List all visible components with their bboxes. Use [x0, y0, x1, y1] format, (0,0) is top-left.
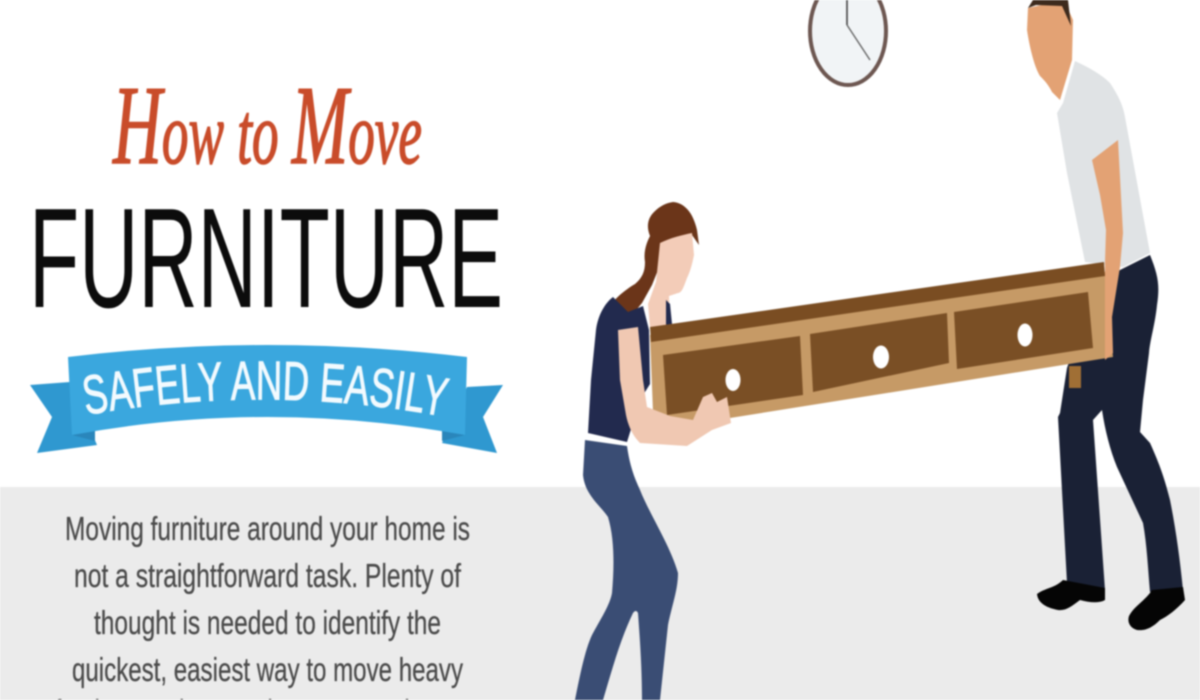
intro paragraph — [55, 510, 480, 700]
woman face and neck — [648, 233, 694, 328]
title: FURNITURE: FURNITURE — [29, 179, 503, 338]
man trousers — [1058, 255, 1183, 592]
woman hair — [606, 202, 699, 320]
intro paragraph: quickest, easiest way to move heavy — [72, 651, 463, 688]
man head — [1027, 0, 1073, 100]
ribbon banner: Safely and Easily — [30, 344, 504, 454]
man hair — [1028, 0, 1071, 26]
title: How to Move: How to Move — [112, 64, 422, 188]
intro paragraph: not a straightforward task. Plenty of — [74, 557, 462, 594]
sideboard frame — [650, 272, 1113, 424]
left drawer — [663, 336, 803, 415]
man right shoe — [1128, 587, 1185, 630]
man shirt — [1057, 61, 1150, 267]
floor band — [0, 487, 1200, 700]
knobs — [726, 324, 1032, 391]
right drawer — [954, 292, 1093, 369]
figure: woman lifting — [575, 202, 699, 700]
woman trousers — [575, 440, 678, 700]
woman arm and hand — [618, 327, 731, 446]
furniture: sideboard — [650, 262, 1113, 424]
middle drawer — [810, 313, 949, 392]
figure: man lifting — [1027, 0, 1185, 630]
intro paragraph: Moving furniture around your home is — [65, 510, 470, 547]
icon: wall clock — [810, 0, 886, 85]
woman shirt — [588, 297, 650, 442]
man arm and hand — [1092, 140, 1123, 360]
man left shoe — [1037, 580, 1105, 610]
banner text: SAFELY AND EASILY — [82, 360, 451, 416]
intro paragraph: thought is needed to identify the — [94, 604, 441, 641]
sideboard top — [650, 262, 1105, 342]
sideboard leg — [1069, 366, 1081, 388]
